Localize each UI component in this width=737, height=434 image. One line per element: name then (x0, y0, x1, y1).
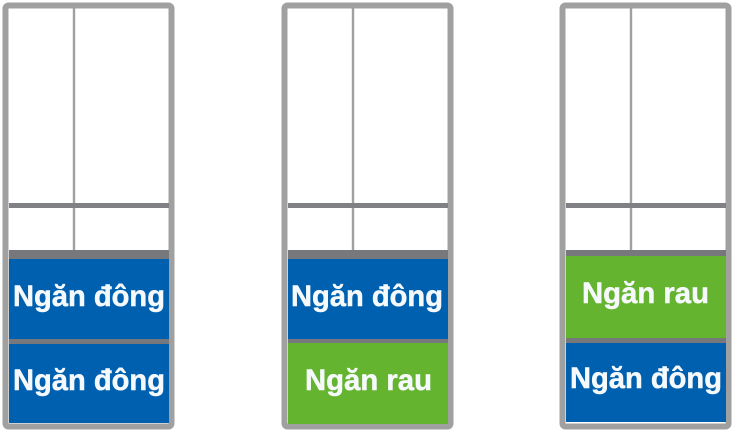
fridge 2 drawer separator (288, 339, 448, 343)
fridge 3 shelf bar (566, 203, 726, 208)
fridge 1 freezer drawer bottom (9, 344, 169, 423)
fridge 1 freezer drawer bottom: Ngăn đông (13, 364, 165, 397)
fridge 1 freezer drawer top: Ngăn đông (13, 280, 165, 313)
panel: fridge 1 (6, 6, 172, 426)
fridge 3 door divider (630, 8, 632, 250)
fridge 1 door divider (73, 8, 75, 250)
fridge 3 lower shelf bar (566, 250, 726, 256)
fridge 2 freezer drawer: Ngăn đông (291, 280, 443, 313)
fridge 3 freezer drawer (566, 343, 726, 422)
fridge 3 vegetable drawer: Ngăn rau (582, 277, 709, 310)
fridge 1 drawer separator (9, 339, 169, 344)
fridge 2 body (284, 6, 450, 426)
panel: fridge 2 (284, 6, 450, 426)
fridge 2 freezer drawer (288, 259, 448, 339)
fridge 2 shelf bar (288, 203, 448, 208)
fridge 1 freezer drawer top (9, 259, 169, 339)
fridge 2 vegetable drawer (288, 343, 448, 424)
fridge 3 body (562, 6, 728, 426)
fridge 2 lower shelf bar (288, 250, 448, 259)
fridge 3 freezer drawer: Ngăn đông (570, 362, 722, 395)
fridge 2 door divider (352, 8, 354, 250)
fridge 3 drawer separator (566, 338, 726, 343)
fridge 1 shelf bar (9, 203, 169, 208)
fridge 1 lower shelf bar (9, 250, 169, 259)
panel: fridge 3 (562, 6, 728, 426)
fridge 2 vegetable drawer: Ngăn rau (305, 364, 432, 397)
fridge 3 vegetable drawer (566, 256, 726, 338)
fridge 1 body (6, 6, 172, 426)
